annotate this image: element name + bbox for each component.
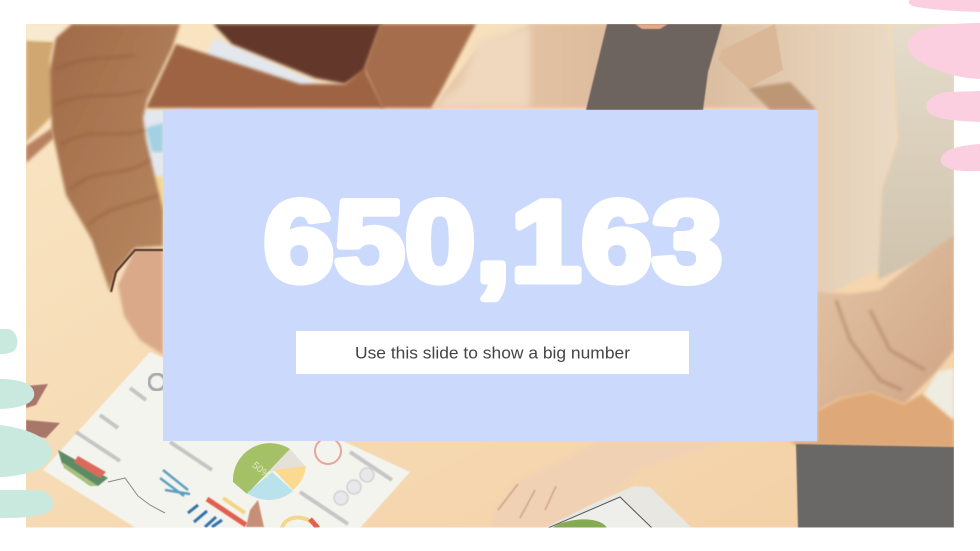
brown sweater: left arm [50, 24, 180, 292]
left hand [118, 249, 163, 355]
white gap near window [924, 368, 954, 420]
jacket left lighter panel [432, 24, 530, 108]
caption box [296, 331, 689, 374]
fingertip over report [246, 500, 264, 527]
heat grid on report [58, 450, 108, 486]
line chart on report [108, 478, 165, 513]
donut chart on report [149, 374, 165, 390]
beige jacket [432, 24, 896, 300]
big number: 650,163 [264, 178, 722, 306]
brown sweater: right sleeve [364, 24, 476, 108]
sweater fold marks [72, 55, 158, 224]
caption text: Use this slide to show a big number [355, 344, 630, 362]
semicircle gauge on report [282, 517, 318, 528]
pie chart on report [233, 443, 306, 500]
right arm sleeve [817, 235, 954, 411]
panel: big number card [163, 110, 817, 441]
fingers at left edge [26, 384, 60, 438]
brown sweater: forearm [146, 44, 384, 108]
pie chart on report: 50% [250, 460, 272, 481]
printed report sheet [43, 352, 410, 528]
jacket lapel [718, 24, 783, 88]
decoration: pink brush strokes, top right [908, 0, 980, 171]
text lines on report [76, 388, 392, 524]
red and blue bar chart on report [188, 498, 246, 527]
decoration: mint brush strokes, bottom left [0, 329, 53, 518]
blue bars on report [160, 470, 190, 496]
tablet [545, 486, 692, 528]
forearm and hand at the bottom [544, 444, 710, 524]
orange table edge [790, 392, 954, 448]
small bowl icons on report [334, 468, 374, 505]
grey sweater [586, 24, 722, 110]
box at top left [26, 40, 56, 142]
cuff shadow [111, 250, 163, 292]
grey notebook [796, 444, 954, 528]
dark brown torso [213, 24, 382, 84]
wall [878, 24, 954, 280]
circular mark on report [315, 438, 341, 464]
papers behind arm [143, 38, 320, 180]
